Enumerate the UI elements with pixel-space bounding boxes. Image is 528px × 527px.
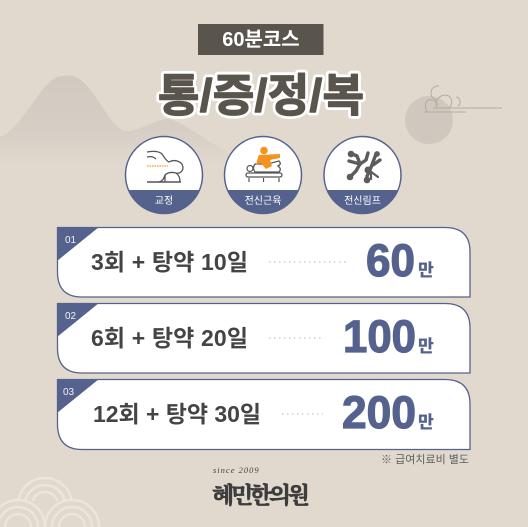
badge: 교정: 교정	[155, 195, 173, 207]
card: 12회 200만: 만	[418, 413, 434, 432]
card: 6회 100만: 만	[418, 337, 434, 356]
moon and cloud illustration	[405, 86, 502, 144]
card: 3회 60만: 3회 + 탕약 10일	[91, 249, 248, 275]
card: 12회 200만: 200	[342, 387, 416, 438]
icon: spine posture	[147, 151, 183, 182]
badge: 전신근육	[224, 136, 302, 214]
card: 3회 60만: 만	[418, 261, 434, 280]
card: 6회 100만: 100	[343, 311, 416, 362]
card: 3회 60만: 01	[65, 235, 77, 246]
card: 12회 200만: 03	[63, 387, 75, 398]
footnote: ※ 급여치료비 별도	[381, 453, 469, 466]
badge: 전신림프	[324, 136, 401, 214]
mountain illustration	[0, 75, 228, 165]
logo: since 2009	[213, 465, 260, 475]
icon: lymph	[348, 152, 380, 182]
card: 6회 100만	[57, 303, 470, 373]
badge: 전신림프: 전신림프	[344, 195, 381, 207]
title: 통/증/정/복	[158, 70, 364, 121]
course label	[198, 24, 324, 55]
card: 6회 100만: 6회 + 탕약 20일	[91, 325, 248, 351]
card: 3회 60만	[57, 227, 470, 297]
card: 12회 200만	[57, 379, 470, 450]
wave pattern	[0, 478, 99, 527]
card: 3회 60만: 60	[366, 235, 415, 286]
logo: 혜민한의원	[212, 477, 310, 510]
card: 12회 200만: 12회 + 탕약 30일	[93, 401, 261, 427]
badge: 교정	[126, 136, 202, 214]
badge: 전신근육: 전신근육	[245, 195, 281, 207]
card: 6회 100만: 02	[65, 311, 77, 322]
icon: massage	[246, 147, 282, 182]
course label: 60분코스	[222, 29, 300, 51]
title: 통/증/정/복	[158, 70, 364, 121]
